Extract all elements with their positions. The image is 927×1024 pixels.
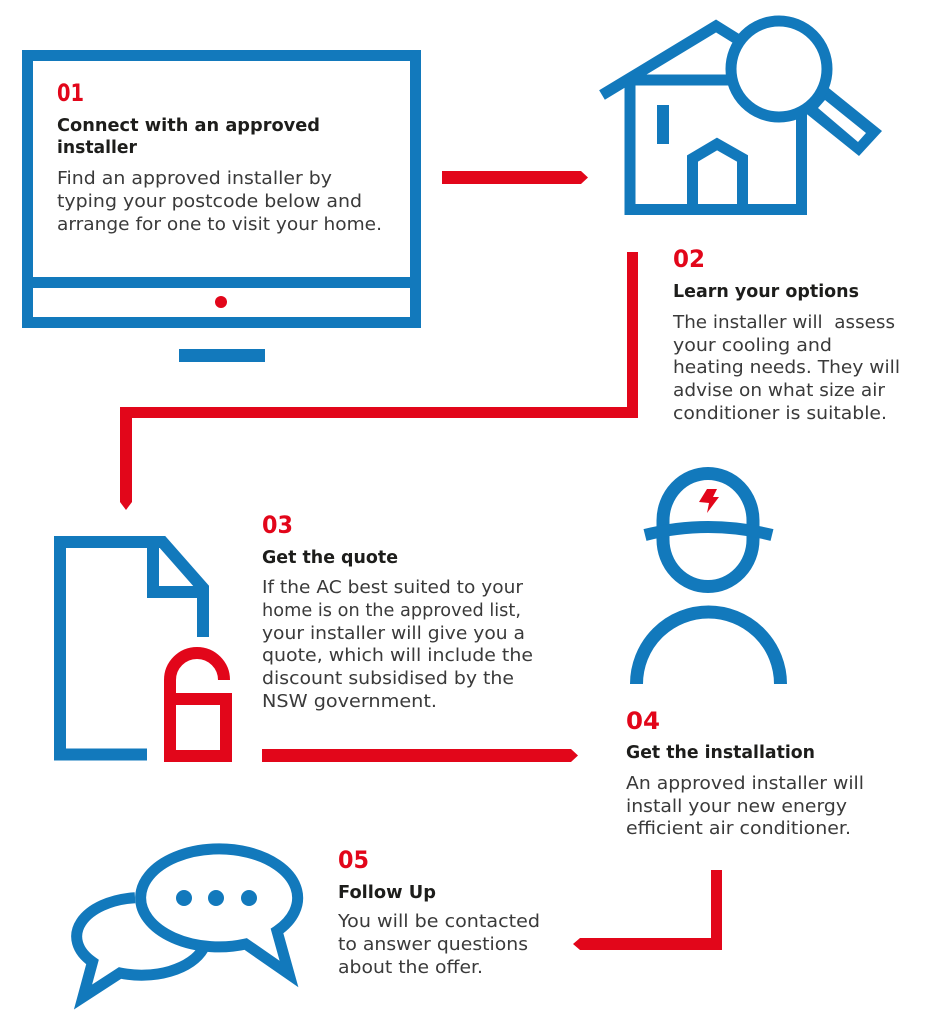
step 04 body: An approved installer will (626, 773, 864, 794)
step 02 body: advise on what size air (673, 380, 886, 401)
step 03 body: home is on the approved list, (262, 600, 521, 621)
step 05 number: 05 (338, 846, 369, 874)
step 05 heading: Follow Up (338, 882, 436, 903)
step 01 body: arrange for one to visit your home. (57, 214, 382, 235)
step 02 heading: Learn your options (673, 281, 859, 302)
step 03 body: quote, which will include the (262, 645, 533, 666)
step 05 text (337, 846, 540, 978)
step 04 number: 04 (626, 707, 660, 735)
step 05 body: to answer questions (338, 934, 528, 955)
step 02 body (672, 312, 900, 424)
icon: house with magnifying glass (602, 21, 882, 210)
step 01 heading: installer (57, 137, 137, 158)
step 01 number: 01 (57, 79, 84, 107)
step 03 body: If the AC best suited to your (262, 577, 524, 598)
step 03 body: discount subsidised by the (262, 668, 514, 689)
step 03 body: NSW government. (262, 691, 437, 712)
step 01 body (57, 168, 382, 235)
step 03 body (262, 577, 533, 712)
step 04 body: efficient air conditioner. (626, 818, 851, 839)
step 01 heading (57, 115, 320, 158)
step 03 heading: Get the quote (262, 547, 398, 568)
step 01 body: typing your postcode below and (57, 191, 362, 212)
step 02 body: conditioner is suitable. (673, 403, 887, 424)
padlock (170, 653, 226, 756)
step 01 text (57, 79, 382, 235)
icon: speech bubbles (77, 849, 298, 997)
step 04 body (626, 773, 864, 839)
step 05 body: You will be contacted (337, 911, 540, 932)
arrow: step 01 to step 02 (442, 171, 588, 184)
step 03 number: 03 (262, 511, 293, 539)
step 04 body: install your new energy (626, 796, 847, 817)
icon: installer with hard hat (636, 474, 780, 684)
step 01 body: Find an approved installer by (57, 168, 332, 189)
step 05 body (337, 911, 540, 978)
arrow: step 04 to step 05 (573, 870, 722, 950)
step 02 body: your cooling and (673, 335, 832, 356)
step 05 body: about the offer. (338, 957, 483, 978)
icon: document with padlock (60, 542, 226, 756)
step 02 body: The installer will assess (672, 312, 895, 333)
step 02 body: heating needs. They will (673, 357, 900, 378)
icon: computer monitor (22, 56, 421, 362)
step 04 heading: Get the installation (626, 742, 815, 763)
step 03 text (262, 511, 533, 712)
step 02 text (672, 245, 900, 424)
step 01 heading: Connect with an approved (57, 115, 320, 136)
step 03 body: your installer will give you a (262, 623, 525, 644)
arrow: step 03 to step 04 (262, 749, 578, 762)
arrow: step 02 to step 03 (120, 252, 638, 510)
step 04 text (626, 707, 864, 839)
step 02 number: 02 (673, 245, 705, 273)
